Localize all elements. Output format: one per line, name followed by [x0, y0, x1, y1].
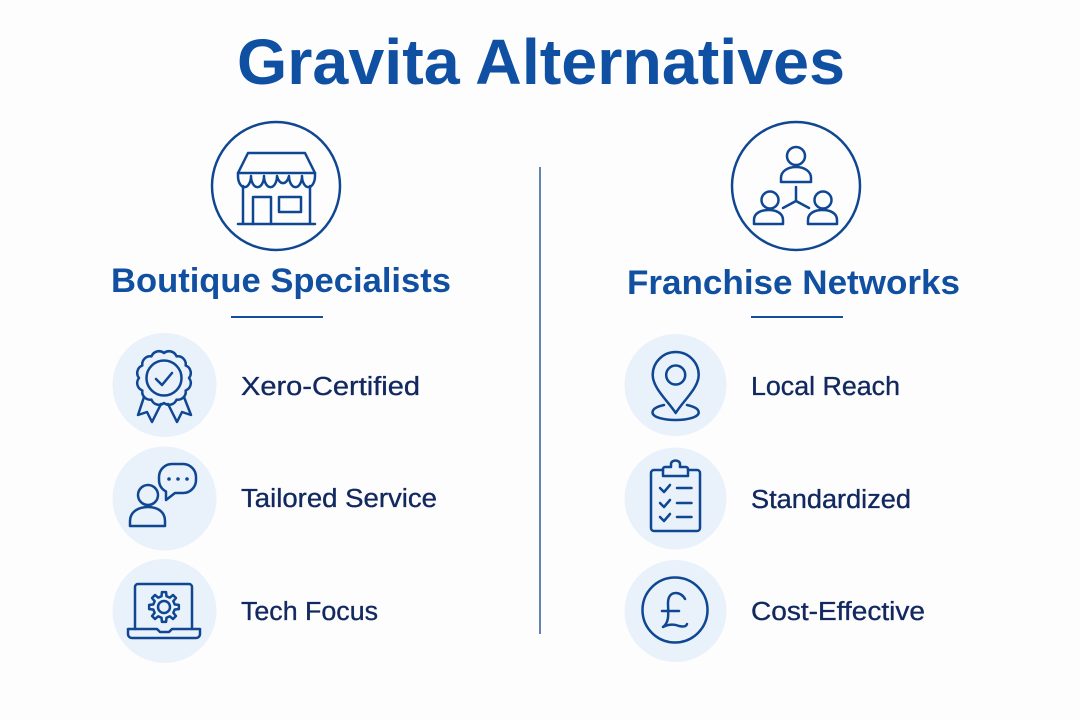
title: Gravita Alternatives	[237, 26, 845, 98]
item: standardized	[624, 448, 911, 550]
center divider	[539, 167, 541, 634]
label: local reach: Local Reach	[751, 373, 900, 401]
label: tech focus: Tech Focus	[241, 598, 378, 626]
label: cost-effective: Cost-Effective	[751, 598, 925, 626]
item: local reach	[624, 334, 900, 436]
panel: franchise networks	[624, 122, 960, 662]
icon: pound coin	[624, 560, 726, 662]
icon: clipboard checklist	[624, 448, 726, 550]
heading: boutique specialists: Boutique Specialists	[111, 262, 451, 300]
icon: laptop with gear	[112, 559, 216, 663]
heading: franchise networks: Franchise Networks	[627, 264, 960, 302]
icon: award badge	[112, 333, 216, 437]
icon: map pin	[624, 334, 726, 436]
label: xero-certified: Xero-Certified	[241, 373, 420, 401]
item: tech focus	[112, 559, 378, 663]
panel: boutique specialists	[111, 122, 451, 663]
heading underline	[231, 316, 323, 318]
item: cost-effective	[624, 560, 925, 662]
item: xero-certified	[112, 333, 420, 437]
heading underline	[751, 316, 843, 318]
icon: connected people	[732, 122, 860, 250]
item: tailored service	[112, 446, 437, 550]
label: tailored service: Tailored Service	[241, 485, 437, 513]
icon: person with speech bubble	[112, 446, 216, 550]
label: standardized: Standardized	[751, 486, 911, 514]
icon: storefront	[212, 122, 340, 250]
